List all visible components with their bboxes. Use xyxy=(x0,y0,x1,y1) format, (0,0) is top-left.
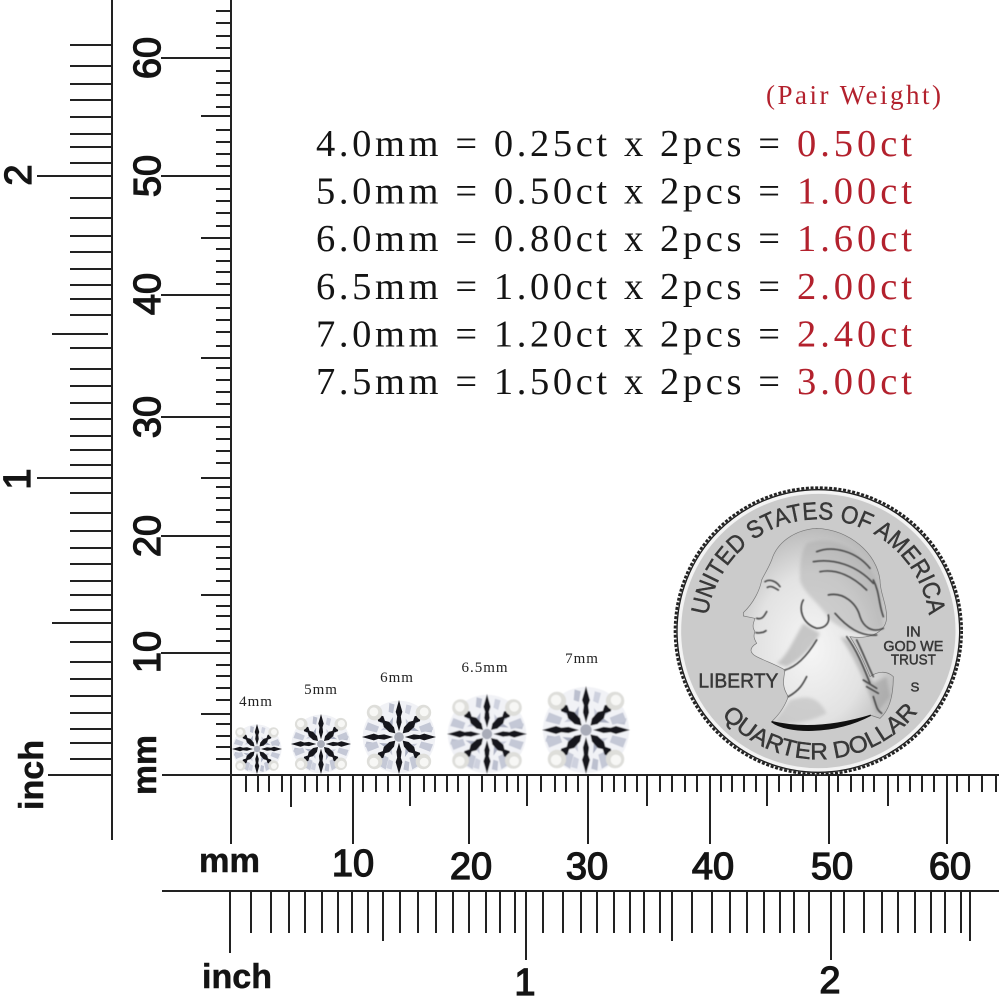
left vertical inch ruler xyxy=(37,0,112,840)
diamond 4mm xyxy=(232,694,282,774)
diamond 5mm: 5mm xyxy=(304,682,338,698)
horizontal ruler millimetre numbers: 20 xyxy=(450,846,492,888)
row 7.0mm: 7.0mm = 1.20ct x 2pcs = xyxy=(316,314,780,356)
coin lettering: TRUST xyxy=(891,652,936,668)
row 6.0mm: 6.0mm = 0.80ct x 2pcs = xyxy=(316,218,780,260)
vertical ruler millimetre numbers: 60 xyxy=(127,37,169,79)
horizontal ruler millimetre numbers: 50 xyxy=(811,846,853,888)
coin lettering: GOD WE xyxy=(883,639,944,655)
row 6.5mm: 6.5mm = 1.00ct x 2pcs = xyxy=(316,266,780,308)
coin edge xyxy=(675,488,962,774)
horizontal ruler millimetre numbers: mm xyxy=(199,842,260,880)
vertical ruler millimetre numbers xyxy=(126,37,169,795)
diamond 5mm xyxy=(291,682,351,774)
washington portrait xyxy=(743,528,893,730)
coin lettering: S xyxy=(911,680,920,695)
row 5.0mm: 1.00ct xyxy=(797,170,912,212)
row 6.0mm: 1.60ct xyxy=(797,218,912,260)
left ruler inch numbers: inch xyxy=(13,740,51,810)
coin lettering: IN xyxy=(906,625,921,641)
pair weight heading: (Pair Weight) xyxy=(766,80,941,110)
row 7.0mm: 2.40ct xyxy=(797,314,912,356)
left ruler inch numbers xyxy=(0,164,51,810)
vertical ruler millimetre numbers: 50 xyxy=(127,155,169,197)
horizontal ruler millimetre numbers: 60 xyxy=(929,846,971,888)
vertical ruler millimetre numbers: 20 xyxy=(127,515,169,557)
diamond 6mm: 6mm xyxy=(380,670,414,686)
vertical ruler millimetre numbers: mm xyxy=(126,735,164,795)
diamond 6.5mm: 6.5mm xyxy=(461,660,509,676)
horizontal ruler millimetre numbers xyxy=(199,842,971,888)
coin lettering: QUARTER DOLLAR xyxy=(725,704,918,760)
diamond 6mm xyxy=(362,670,436,774)
coin lettering: LIBERTY xyxy=(698,670,778,692)
row 4.0mm: 0.50ct xyxy=(797,123,912,165)
second vertical millimetre ruler xyxy=(161,0,231,775)
row 6.5mm: 2.00ct xyxy=(797,266,912,308)
diamond 7mm: 7mm xyxy=(565,651,599,667)
vertical ruler millimetre numbers: 10 xyxy=(127,631,169,673)
vertical ruler millimetre numbers: 40 xyxy=(127,273,169,315)
row 7.5mm: 7.5mm = 1.50ct x 2pcs = xyxy=(316,361,780,403)
quarter dollar coin xyxy=(674,486,963,774)
hair shading xyxy=(775,540,890,723)
row 5.0mm: 5.0mm = 0.50ct x 2pcs = xyxy=(316,170,780,212)
horizontal ruler inch numbers: inch xyxy=(202,958,272,996)
diamond 6.5mm xyxy=(447,660,527,774)
horizontal inch ruler xyxy=(162,891,999,960)
diamond 4mm: 4mm xyxy=(239,694,273,710)
coin lettering xyxy=(691,502,945,760)
horizontal ruler millimetre numbers: 40 xyxy=(692,846,734,888)
diamond 7mm xyxy=(542,651,630,774)
horizontal ruler millimetre numbers: 30 xyxy=(566,846,608,888)
hair and face lines xyxy=(756,549,883,713)
vertical ruler millimetre numbers: 30 xyxy=(127,396,169,438)
size and carat table xyxy=(316,123,912,403)
coin lettering: UNITED STATES OF AMERICA xyxy=(691,502,945,616)
horizontal millimetre ruler xyxy=(231,775,999,844)
row 4.0mm: 4.0mm = 0.25ct x 2pcs = xyxy=(316,123,780,165)
horizontal ruler millimetre numbers: 10 xyxy=(332,843,374,885)
row 7.5mm: 3.00ct xyxy=(797,361,912,403)
horizontal ruler inch numbers xyxy=(202,958,841,1000)
